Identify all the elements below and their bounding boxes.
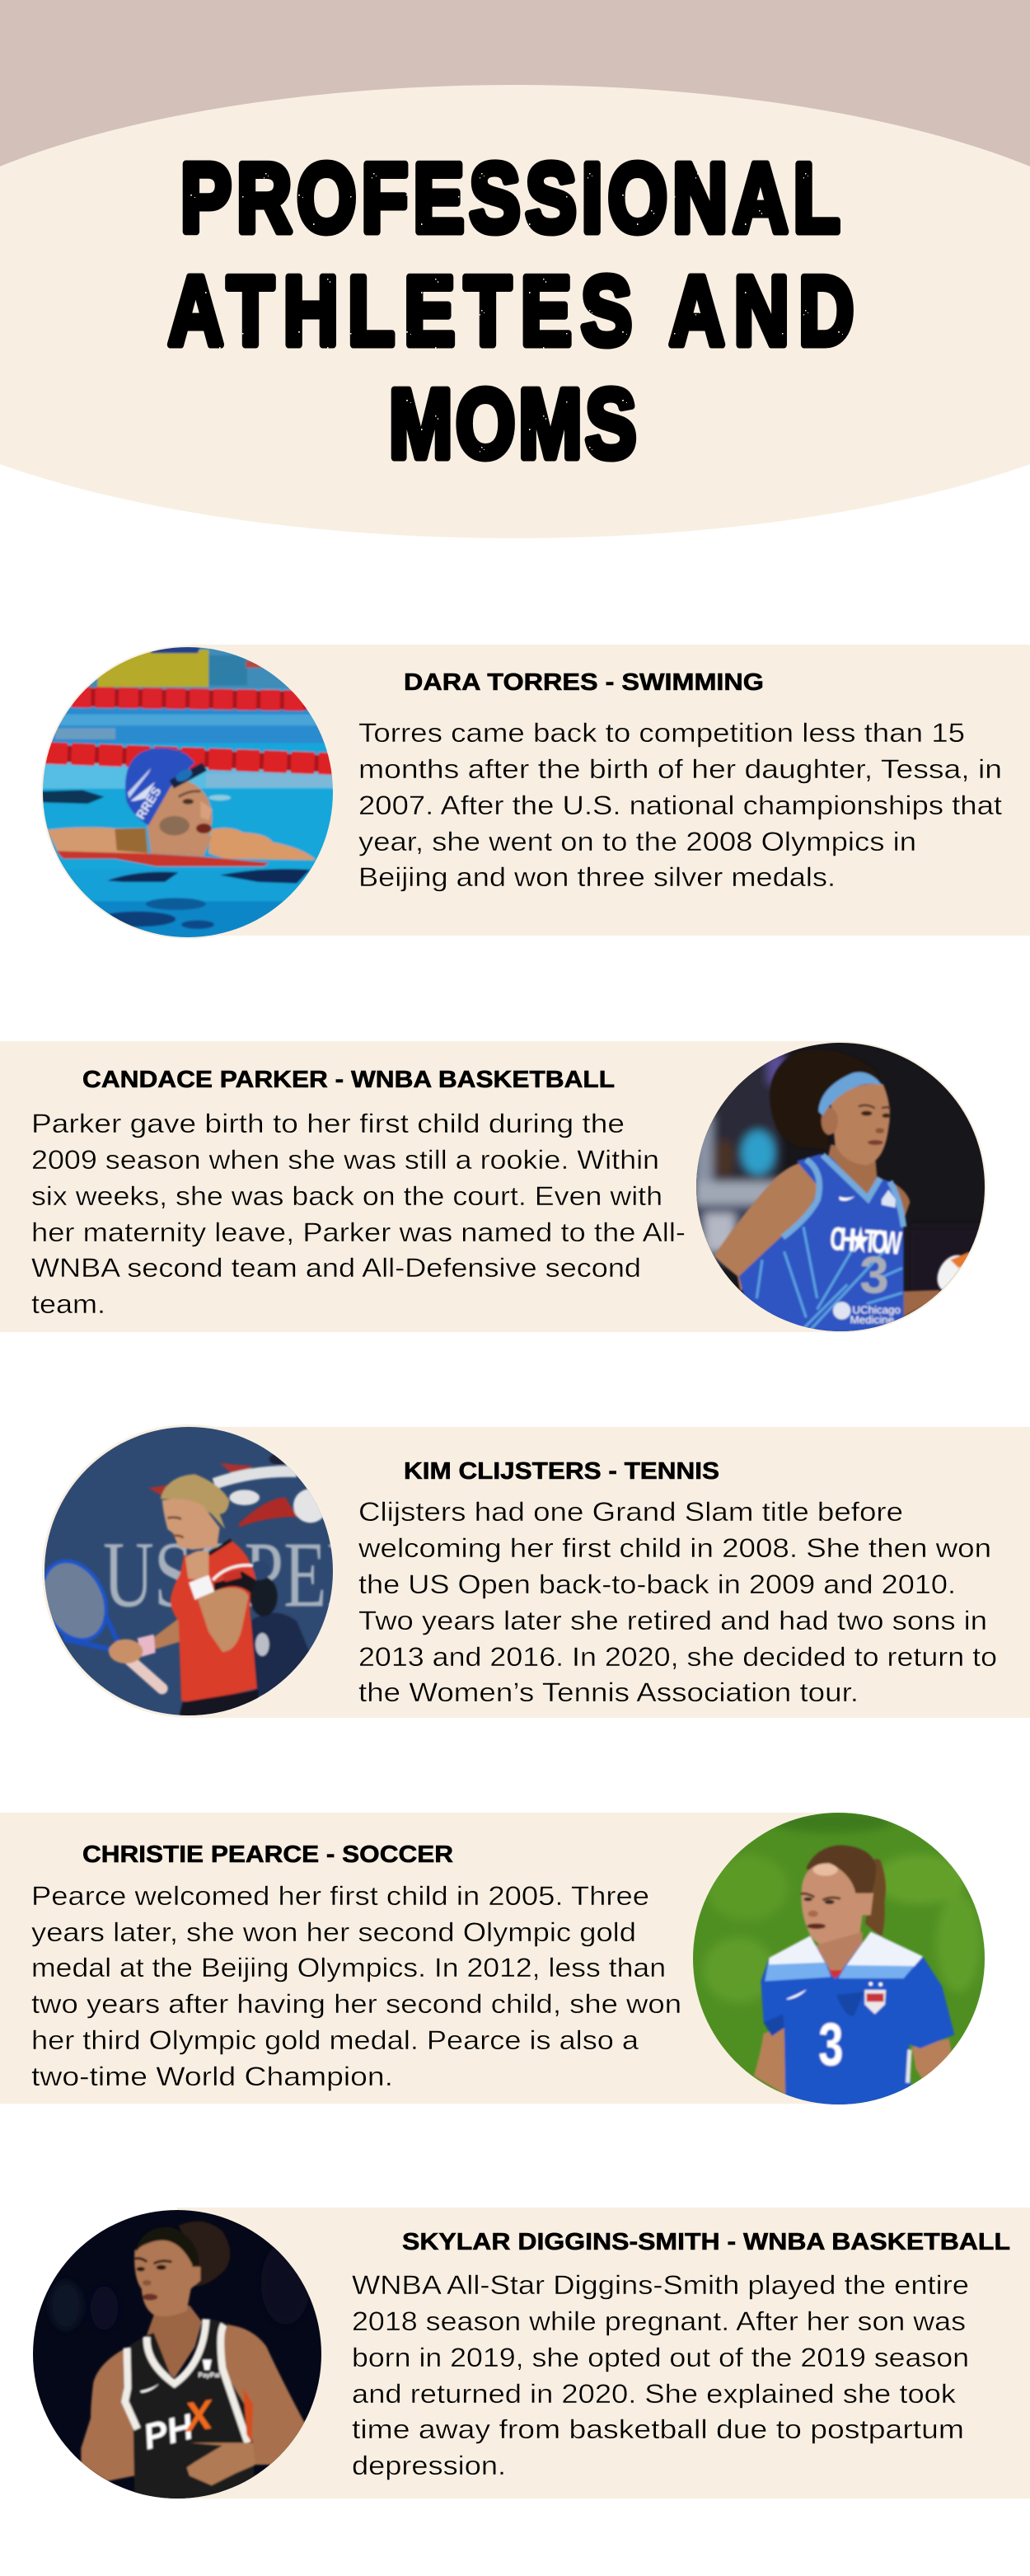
body text: [31, 1881, 681, 2091]
photo: basketball player in black jersey: [33, 2210, 321, 2499]
body text: six weeks, she was back on the court. Even with: [31, 1181, 662, 1211]
body text: Torres came back to competition less than 15: [358, 718, 965, 748]
photo: basketball player in black jersey: PayPal: [199, 2372, 220, 2379]
body text: Pearce welcomed her first child in 2005. Three: [31, 1881, 649, 1911]
body text: 2018 season while pregnant. After her son was: [352, 2306, 966, 2336]
heading: DARA TORRES - SWIMMING: [404, 669, 764, 696]
body text: Parker gave birth to her first child during the: [31, 1109, 625, 1138]
body text: Two years later she retired and had two sons in: [358, 1606, 987, 1635]
body text: her third Olympic gold medal. Pearce is also a: [31, 2025, 639, 2055]
photo: basketball player in black jersey: PH: [139, 2407, 199, 2457]
panel background band: [0, 1813, 839, 2104]
title: PROFESSIONAL: [180, 143, 840, 253]
body text: years later, she won her second Olympic gold: [31, 1917, 636, 1947]
photo: basketball player in blue jersey: CHI★TOW: [829, 1220, 903, 1261]
body text: welcoming her first child in 2008. She then won: [358, 1533, 991, 1563]
body text: two years after having her second child, she won: [31, 1989, 681, 2019]
title: MOMS: [389, 368, 636, 479]
body text: depression.: [352, 2451, 506, 2480]
panel: Candace Parker: [0, 1035, 997, 1344]
photo: basketball player in black jersey: X: [179, 2391, 218, 2441]
body text: [358, 718, 1002, 892]
body text: and returned in 2020. She explained she took: [352, 2379, 957, 2409]
body text: born in 2019, she opted out of the 2019 season: [352, 2343, 969, 2372]
photo: soccer player in blue jersey: [693, 1813, 985, 2104]
body text: time away from basketball due to postpartum: [352, 2414, 964, 2444]
body text: Clijsters had one Grand Slam title before: [358, 1497, 903, 1527]
body text: [358, 1497, 997, 1707]
body text: the Women’s Tennis Association tour.: [358, 1677, 859, 1707]
body text: [31, 1109, 686, 1319]
body text: medal at the Beijing Olympics. In 2012, less than: [31, 1953, 666, 1982]
body text: her maternity leave, Parker was named to the All-: [31, 1218, 686, 1247]
panel background band: [190, 645, 1030, 936]
photo: soccer player in blue jersey: 3: [818, 2011, 843, 2078]
body text: months after the birth of her daughter, Tessa, in: [358, 754, 1002, 784]
heading: CHRISTIE PEARCE - SOCCER: [82, 1842, 453, 1868]
panel background band: [0, 1041, 840, 1332]
photo: swimmer in pool: RRES: [133, 785, 164, 822]
heading: CANDACE PARKER - WNBA BASKETBALL: [82, 1067, 615, 1093]
body text: two-time World Champion.: [31, 2062, 393, 2091]
panel: Dara Torres: [33, 639, 1030, 948]
photo: basketball player in blue jersey: [696, 1041, 986, 1333]
title: [165, 143, 865, 479]
body text: the US Open back-to-back in 2009 and 2010.: [358, 1570, 956, 1599]
photo: basketball player in blue jersey: 3: [859, 1246, 889, 1304]
photo: tennis player in red shirt: USOPEN: [103, 1522, 377, 1626]
body text: 2009 season when she was still a rookie. Within: [31, 1145, 659, 1175]
heading: KIM CLIJSTERS - TENNIS: [404, 1458, 719, 1485]
body text: WNBA second team and All-Defensive second: [31, 1253, 641, 1283]
panel: Kim Clijsters: [30, 1418, 1030, 1727]
photo: basketball player in blue jersey: UChicago: [852, 1303, 901, 1316]
header: mauve top band: [0, 0, 1030, 313]
body text: Beijing and won three silver medals.: [358, 862, 836, 892]
body text: [352, 2270, 969, 2480]
title: ATHLETES AND: [168, 256, 854, 366]
heading: SKYLAR DIGGINS-SMITH - WNBA BASKETBALL: [402, 2229, 1010, 2255]
panel background band: [177, 2208, 1030, 2499]
body text: 2007. After the U.S. national championships that: [358, 791, 1002, 820]
panel background band: [190, 1427, 1030, 1718]
photo: tennis player in red shirt: [42, 1424, 333, 1718]
body text: year, she went on to the 2008 Olympics in: [358, 827, 916, 856]
photo: swimmer in pool: [41, 645, 333, 939]
body text: WNBA All-Star Diggins-Smith played the entire: [352, 2270, 969, 2300]
photo: basketball player in blue jersey: Medicine: [850, 1314, 894, 1326]
header: white lower section under the ellipse: [0, 313, 1030, 552]
panel: Skylar Diggins-Smith: [25, 2201, 1030, 2510]
body text: team.: [31, 1289, 105, 1319]
panel: Christie Pearce: [0, 1805, 993, 2114]
body text: 2013 and 2016. In 2020, she decided to return to: [358, 1642, 997, 1672]
header: cream ellipse: [0, 85, 1030, 538]
